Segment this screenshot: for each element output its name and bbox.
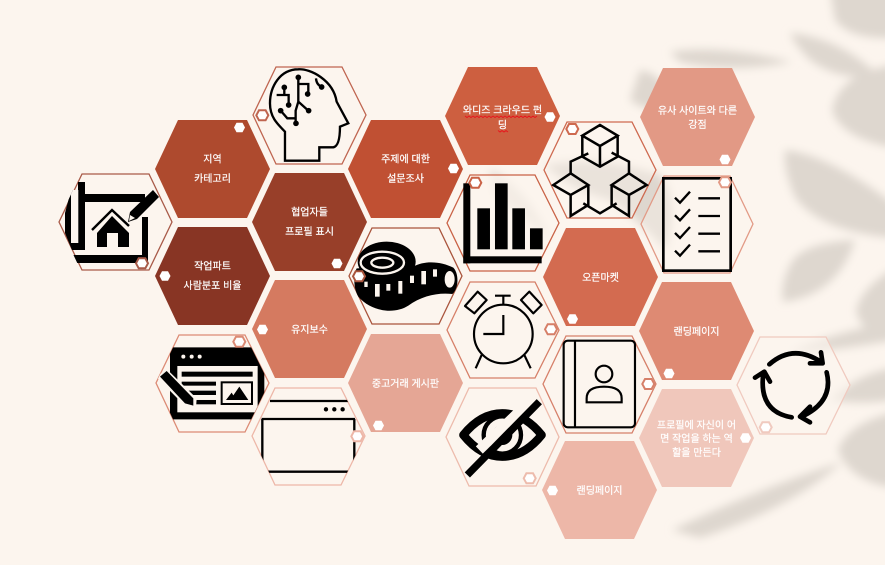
panel: house plan icon hexagon <box>59 174 172 270</box>
panel: 협업자들 프로필 표시: 협업자들 <box>291 206 328 218</box>
panel: 프로필 역할 <box>639 389 754 487</box>
panel: blocks icon hexagon <box>544 122 656 218</box>
panel: measuring tape icon hexagon <box>349 228 462 324</box>
panel: 작업파트 사람분포 비율: 작업파트 <box>194 260 231 272</box>
panel: 랜딩페이지 <box>639 282 754 380</box>
panel: 와디즈 크라우드 펀딩: 딩 <box>498 120 507 132</box>
panel: 유사 사이트와 다른 강점: 유사 사이트와 다른 <box>658 105 737 117</box>
panel: cycle arrows icon hexagon <box>737 337 850 434</box>
panel: contact book icon hexagon <box>543 336 656 433</box>
panel: 지역 카테고리: 지역 <box>203 154 222 166</box>
panel: 협업자들 프로필 표시 <box>252 173 367 271</box>
panel: 유사 사이트와 다른 강점: 강점 <box>688 119 707 131</box>
panel: 협업자들 프로필 표시: 프로필 표시 <box>285 226 334 238</box>
panel: 유사 사이트와 다른 강점 <box>640 68 755 166</box>
panel: 유지보수: 유지보수 <box>291 324 328 336</box>
panel: 작업파트 사람분포 비율 <box>155 227 270 325</box>
panel: 프로필 역할: 프로필에 자신이 어 <box>657 420 736 432</box>
panel: 와디즈 크라우드 펀딩 <box>445 67 560 165</box>
panel: 지역 카테고리: 카테고리 <box>194 173 231 185</box>
panel: hidden eye icon hexagon <box>446 388 559 486</box>
panel: 작업파트 사람분포 비율: 사람분포 비율 <box>184 279 241 292</box>
panel: brain circuit icon hexagon <box>253 67 366 164</box>
panel: 랜딩페이지 하단 <box>542 441 657 539</box>
panel: 프로필 역할: 면 작업을 하는 역 <box>660 432 733 445</box>
panel: alarm clock icon hexagon <box>447 282 559 378</box>
panel: 와디즈 크라우드 펀딩: 와디즈 크라우드 펀 <box>463 104 542 116</box>
panel: 주제에 대한 설문조사 <box>348 120 463 218</box>
panel: bar chart icon hexagon <box>447 175 559 271</box>
panel: 오픈마켓: 오픈마켓 <box>582 272 619 284</box>
panel: 랜딩페이지: 랜딩페이지 <box>674 326 720 338</box>
panel: 중고거래 게시판: 중고거래 게시판 <box>372 378 439 390</box>
panel: 주제에 대한 설문조사: 주제에 대한 <box>381 154 430 166</box>
panel: browser window icon hexagon <box>252 388 365 485</box>
panel: 중고거래 게시판 <box>348 334 463 432</box>
panel: 유지보수 <box>252 280 367 378</box>
panel: 프로필 역할: 할을 만든다 <box>672 447 721 459</box>
panel: web editor icon hexagon <box>156 335 269 432</box>
panel: 지역 카테고리 <box>155 120 270 218</box>
panel: checklist icon hexagon <box>641 176 753 273</box>
panel: 랜딩페이지 하단: 랜딩페이지 <box>576 485 622 497</box>
panel: 주제에 대한 설문조사: 설문조사 <box>387 173 424 185</box>
panel: 오픈마켓 <box>543 228 658 326</box>
